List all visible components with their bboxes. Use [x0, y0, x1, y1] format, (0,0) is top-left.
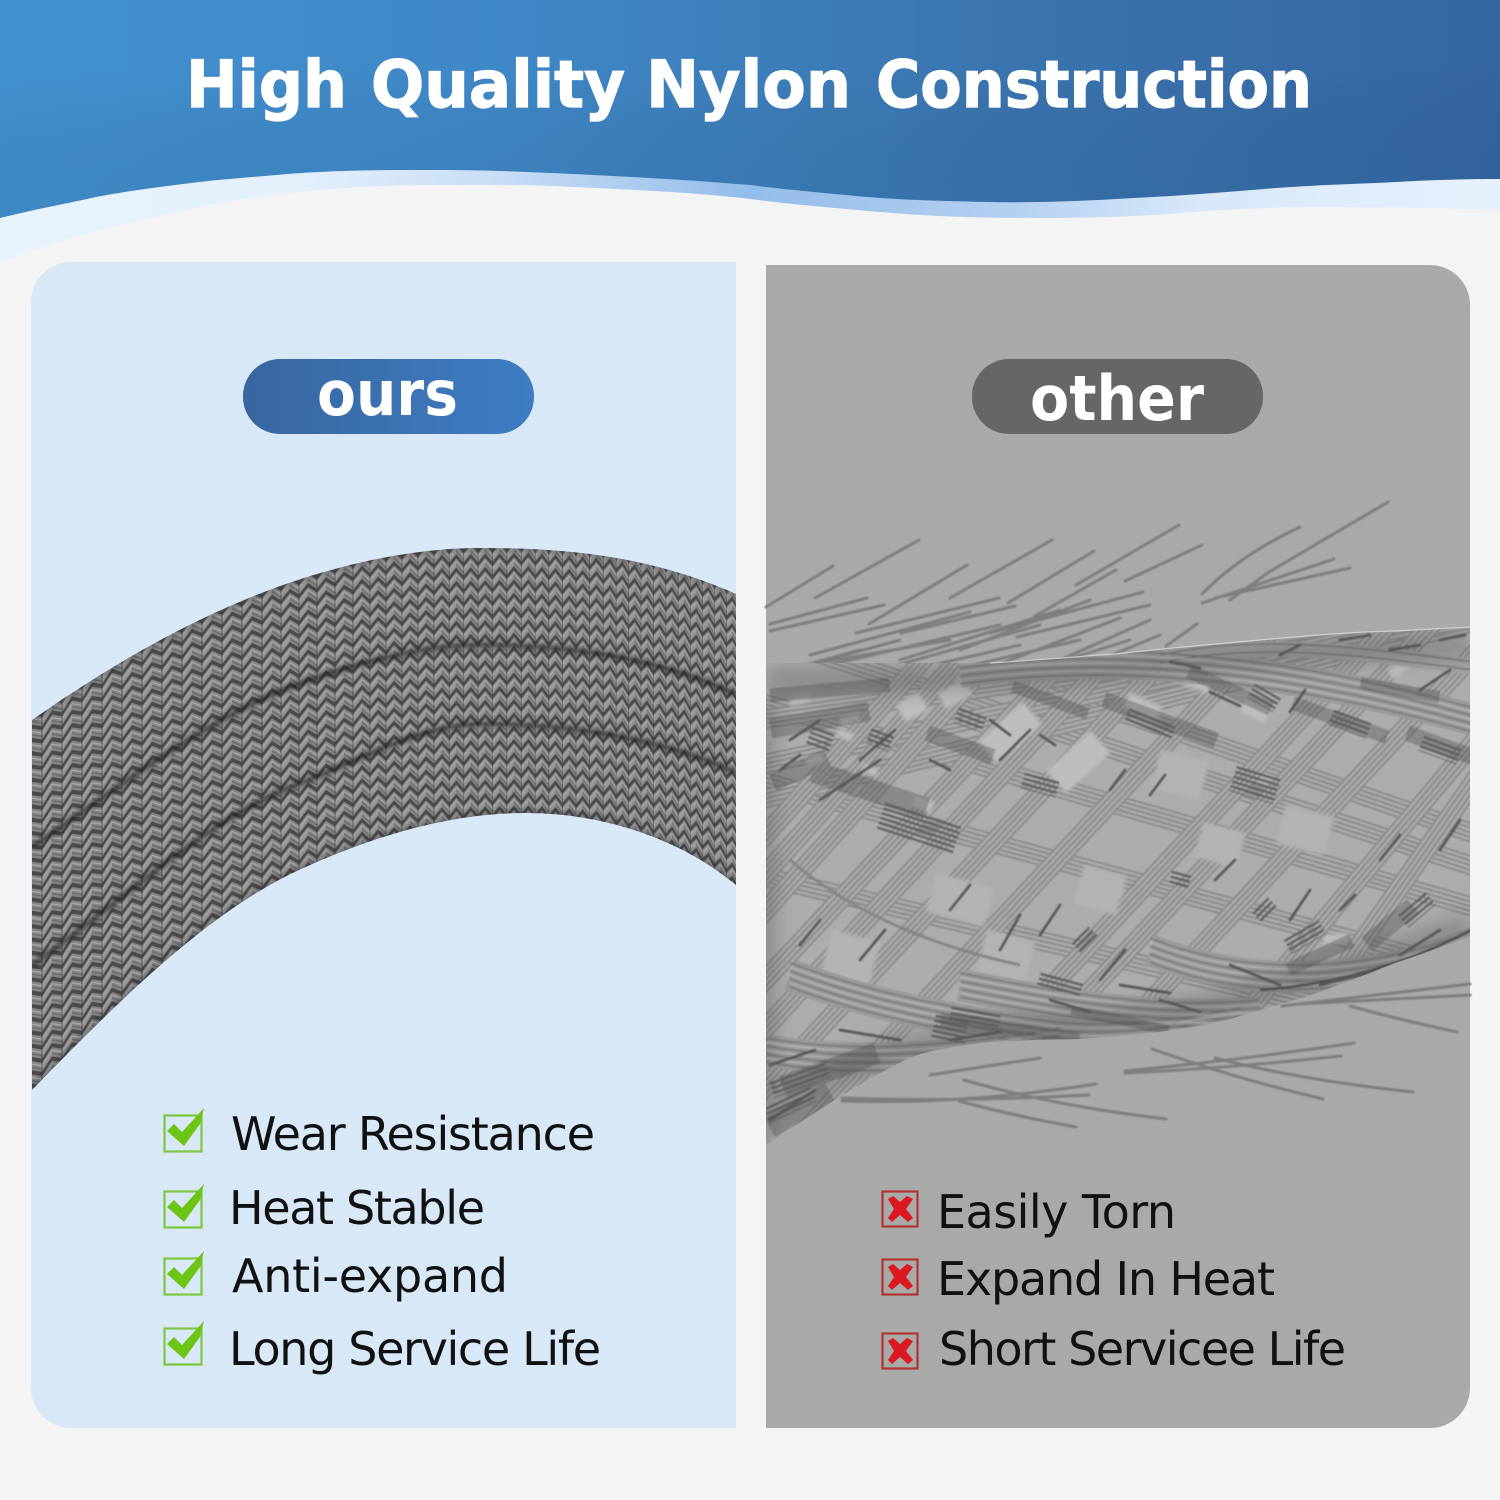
image: frayed loose braid: [764, 500, 1472, 1145]
feature list: ours: [164, 1107, 601, 1376]
title: Quality: [371, 48, 625, 123]
soft windows between the strands: [789, 657, 1411, 991]
item: Heat Stable: Heat Stable: [229, 1181, 485, 1235]
badge: ours: [243, 357, 534, 434]
loose threads: [766, 502, 1470, 1127]
item: Easily Torn: Easily Torn: [937, 1185, 1176, 1239]
badge: ours: ours: [317, 357, 458, 430]
title: Nylon: [646, 48, 851, 123]
translucent dark strand rows: [764, 665, 1476, 1137]
item: Anti-expand: Anti-expand: [232, 1249, 508, 1303]
shading of dense top and bottom: [740, 645, 1470, 1150]
badge: other: [972, 359, 1263, 435]
header banner: [0, 0, 1500, 263]
item: Short Servicee Life: Short Servicee Life: [939, 1322, 1346, 1376]
image: braided nylon hose: [32, 540, 736, 1100]
panel: ours: [31, 262, 736, 1428]
curved edge strand bundles: [766, 644, 1480, 1071]
item: Long Service Life: Long Service Life: [229, 1322, 601, 1376]
title: Construction: [876, 48, 1312, 123]
panel background: ours: [31, 262, 736, 1428]
header light wave: [0, 150, 1500, 263]
panel: other: [764, 265, 1472, 1428]
dark weave accents: [770, 635, 1465, 1120]
dark weave hatch clusters: [787, 691, 1443, 1112]
header blue band: [0, 0, 1500, 218]
panel background: other: [766, 265, 1470, 1428]
feature list: other: [882, 1185, 1346, 1376]
badge: other: other: [1030, 362, 1204, 435]
tube highlight edge: [990, 627, 1470, 663]
title: High: [186, 48, 347, 123]
header shade: [0, 0, 1500, 218]
cross strands: [766, 628, 1470, 1006]
mesh tube: [766, 628, 1470, 1145]
diagonal strands: [766, 630, 1470, 1126]
item: Wear Resistance: Wear Resistance: [231, 1107, 595, 1161]
item: Expand In Heat: Expand In Heat: [937, 1252, 1275, 1306]
